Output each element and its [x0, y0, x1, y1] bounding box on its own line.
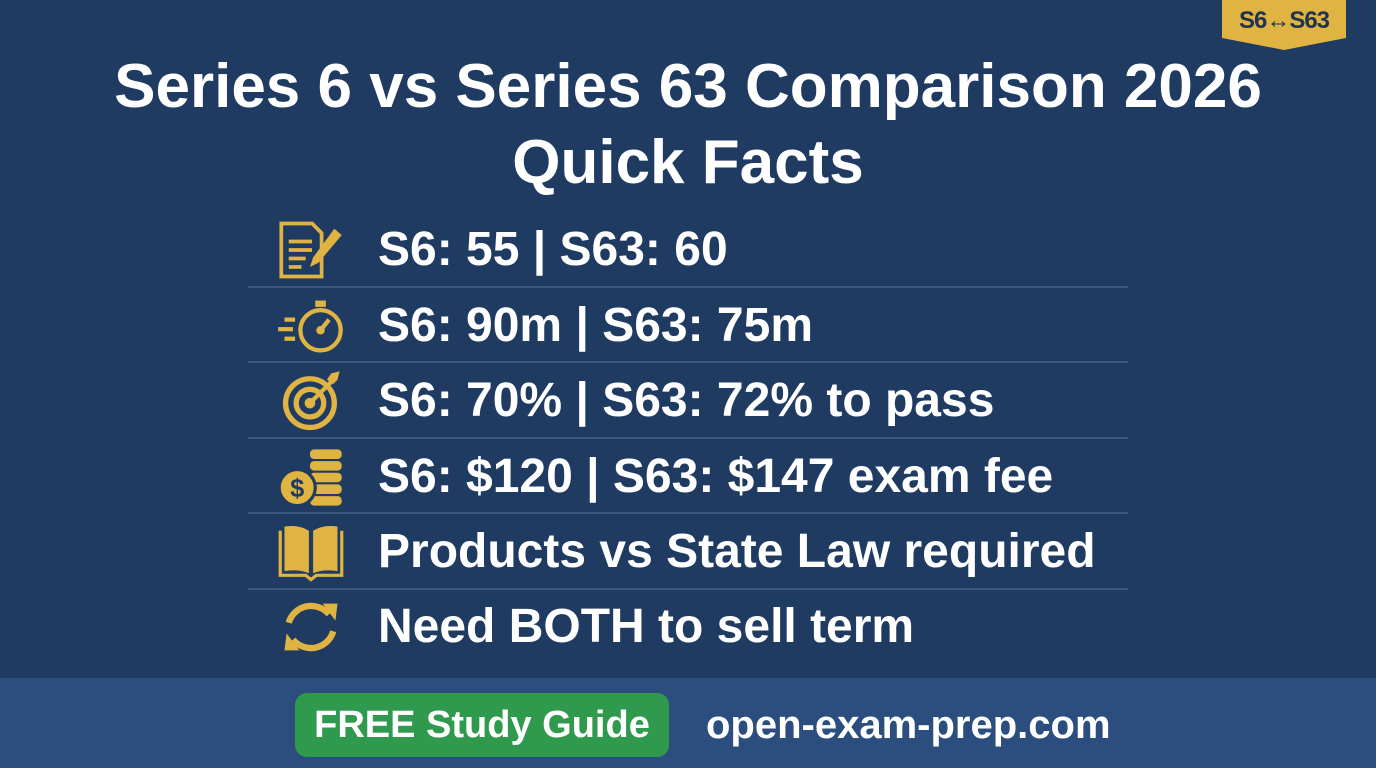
button: free study guide — [295, 693, 669, 757]
subtitle: Quick Facts — [512, 128, 864, 197]
badge: S6↔S63 — [1239, 7, 1330, 34]
row: fee: S6: $120 | S63: $147 exam fee — [378, 450, 1053, 503]
row: both: Need BOTH to sell term — [378, 600, 914, 653]
icon: stopwatch — [278, 300, 343, 352]
footer band — [0, 678, 1376, 768]
url: open-exam-prep.com — [706, 703, 1111, 747]
badge — [1222, 0, 1346, 50]
title: Series 6 vs Series 63 Comparison 2026 — [114, 52, 1262, 121]
icon: coins — [280, 449, 342, 506]
icon: target — [282, 371, 340, 430]
row: time: S6: 90m | S63: 75m — [378, 299, 813, 352]
row: pass score: S6: 70% | S63: 72% to pass — [378, 374, 994, 427]
icon: book — [278, 526, 344, 582]
row: questions: S6: 55 | S63: 60 — [378, 223, 728, 276]
row: content: Products vs State Law required — [378, 525, 1096, 578]
icon: refresh — [284, 602, 338, 652]
icon: coins: $ — [290, 475, 304, 503]
button: free study guide: FREE Study Guide — [314, 704, 650, 746]
icon: document — [279, 222, 342, 278]
